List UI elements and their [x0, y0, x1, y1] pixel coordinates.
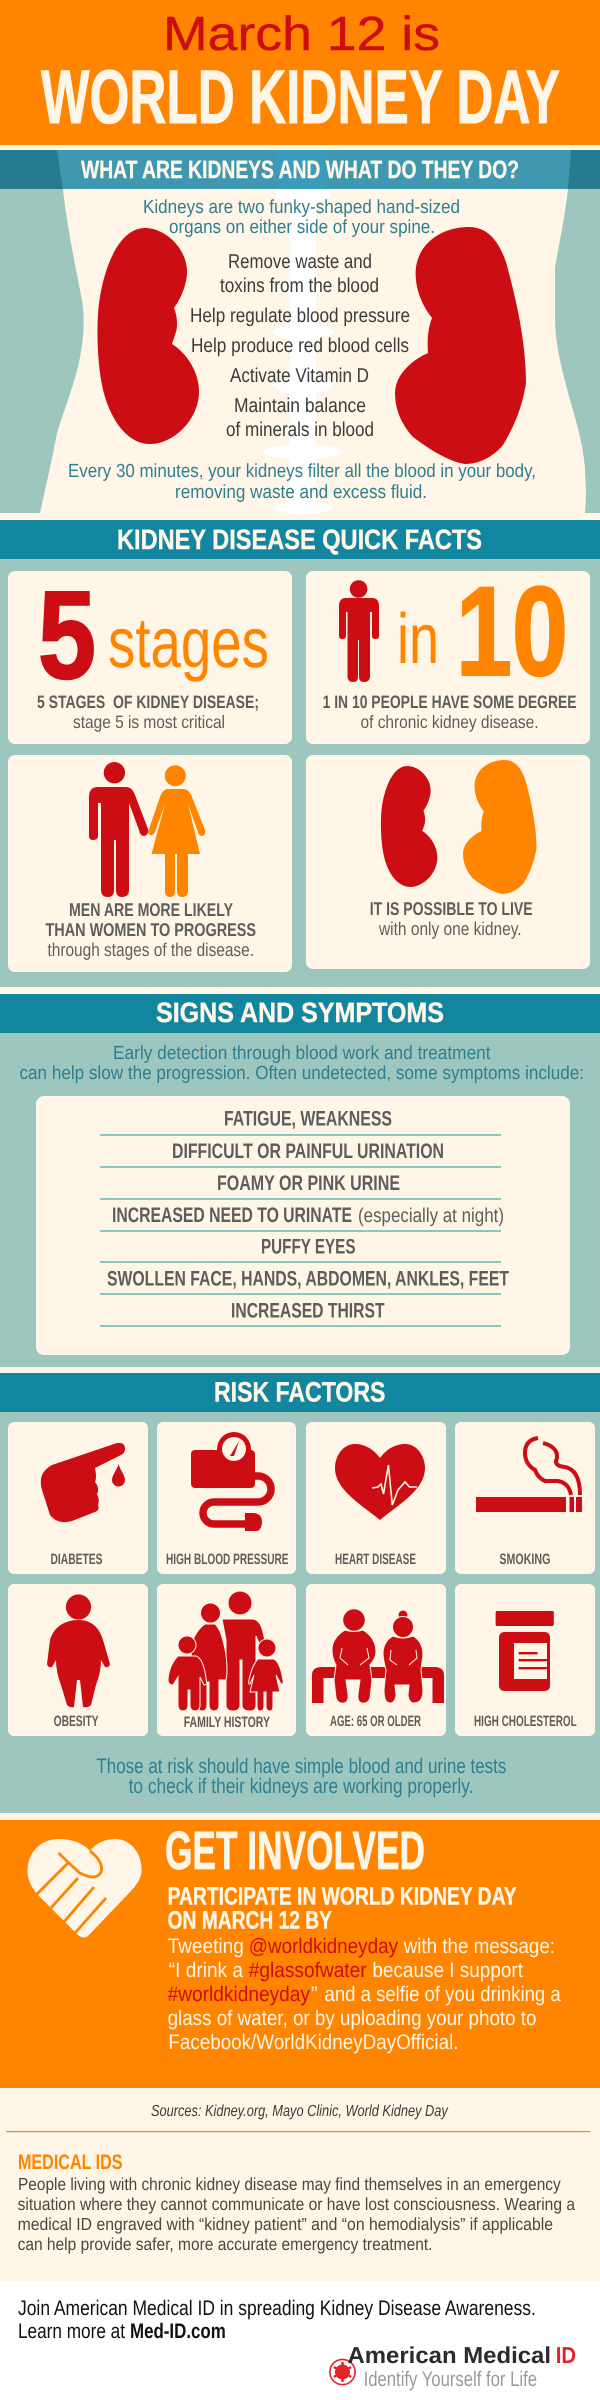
logo: American Medical ID: Identify Yourself for Life: [364, 2368, 537, 2391]
section heading: RISK FACTORS: [214, 1377, 385, 1408]
symptom list: INCREASED NEED TO URINATE: [112, 1204, 352, 1227]
call to join text: [18, 2297, 536, 2343]
symptoms card: [36, 1096, 570, 1355]
card: 1 in 10: [306, 560, 590, 744]
symptom list: DIFFICULT OR PAINFUL URINATION: [172, 1140, 444, 1163]
call to action text: and a selfie of you drinking a: [324, 1983, 561, 2006]
caption: of chronic kidney disease.: [360, 712, 538, 732]
caption: THAN WOMEN TO PROGRESS: [46, 919, 256, 940]
card: obesity: [8, 1584, 148, 1736]
card: heart disease: [306, 1422, 446, 1574]
closing text: to check if their kidneys are working properly.: [129, 1775, 473, 1798]
heading: MEDICAL IDS: [18, 2151, 122, 2174]
call to action text: @worldkidneyday: [249, 1935, 398, 1958]
symptom list: FOAMY OR PINK URINE: [217, 1172, 400, 1195]
label: HEART DISEASE: [335, 1551, 416, 1568]
panel: get involved: [0, 1820, 600, 2088]
title date line: March 12 is: [163, 8, 440, 61]
label: HIGH BLOOD PRESSURE: [166, 1551, 288, 1568]
intro text: [20, 1043, 584, 1084]
label: SMOKING: [499, 1551, 550, 1568]
intro text: Early detection through blood work and treatment: [113, 1043, 491, 1064]
icon: heart-shaped hands: [28, 1839, 142, 1938]
body text: medical ID engraved with “kidney patient” and “on hemodialysis” if applicable: [18, 2214, 553, 2234]
heading: GET INVOLVED: [165, 1821, 425, 1881]
subheading: [168, 1883, 517, 1935]
icon: right kidney: [395, 227, 526, 464]
kidney functions list: Remove waste and: [228, 251, 372, 273]
call to action text: [168, 1935, 561, 2054]
logo: American Medical ID: [330, 2342, 576, 2391]
kidney functions list: Activate Vitamin D: [230, 365, 369, 387]
filter fact text: [68, 461, 536, 503]
label: AGE: 65 OR OLDER: [330, 1713, 421, 1730]
caption: through stages of the disease.: [48, 939, 254, 960]
icon: orange kidney: [463, 760, 536, 894]
symptom list: INCREASED THIRST: [231, 1300, 385, 1323]
call to action text: #glassofwater: [249, 1959, 367, 1982]
call to join text: Med-ID.com: [130, 2320, 226, 2343]
card: diabetes: [8, 1422, 148, 1574]
call to action text: glass of water, or by uploading your photo to: [168, 2007, 536, 2030]
icon: left kidney: [97, 228, 199, 444]
section heading: SIGNS AND SYMPTOMS: [156, 997, 444, 1028]
kidney functions list: of minerals in blood: [226, 419, 374, 441]
icon: seated elderly couple: [312, 1609, 444, 1703]
symptom list: (especially at night): [358, 1205, 504, 1227]
label: FAMILY HISTORY: [184, 1714, 270, 1731]
intro text: Kidneys are two funky-shaped hand-sized: [143, 197, 460, 218]
card: 5 stages: [8, 566, 292, 744]
caption: with only one kidney.: [378, 918, 522, 939]
caption: MEN ARE MORE LIKELY: [69, 899, 234, 920]
call to action text: because I support: [372, 1959, 523, 1982]
header banner: [0, 0, 600, 145]
body text: can help provide safer, more accurate emergency treatment.: [18, 2234, 432, 2254]
word stages: stages: [108, 604, 269, 683]
closing text: [96, 1755, 506, 1798]
card: family history: [157, 1584, 296, 1736]
icon: woman: [148, 765, 205, 897]
panel: quick facts: [0, 520, 600, 987]
call to join text: Learn more at: [18, 2320, 125, 2343]
kidney functions list: Maintain balance: [234, 395, 366, 417]
icon: heart with pulse: [335, 1444, 425, 1520]
icon: person: [339, 580, 379, 682]
kidney functions list: toxins from the blood: [220, 275, 379, 297]
big number 5: 5: [38, 566, 96, 705]
subheading: ON MARCH 12 BY: [168, 1907, 332, 1935]
card: high cholesterol: [455, 1584, 595, 1736]
icon: family: [168, 1591, 283, 1711]
icon: pill bottle: [496, 1611, 554, 1691]
caption: stage 5 is most critical: [73, 712, 225, 732]
icon: cigarette: [476, 1438, 582, 1512]
intro text: organs on either side of your spine.: [169, 217, 435, 238]
caption: 5 STAGES OF KIDNEY DISEASE;: [37, 692, 259, 712]
panel: medical ids: [18, 2151, 575, 2254]
card: age: [306, 1584, 446, 1736]
icon: red kidney: [381, 766, 437, 887]
caption: [370, 898, 533, 939]
kidney functions list: Help produce red blood cells: [191, 335, 409, 357]
logo: American Medical ID: ID: [556, 2342, 576, 2368]
icon: man: [89, 762, 148, 897]
kidney functions list: [190, 251, 410, 441]
symptom list: [107, 1108, 509, 1323]
intro text: [143, 197, 460, 238]
label: OBESITY: [54, 1713, 99, 1730]
call to action text: “I drink a: [169, 1959, 243, 1982]
icon: blood pressure cuff: [191, 1432, 271, 1531]
call to action text: #worldkidneyday: [168, 1983, 310, 2006]
footer: [0, 2281, 600, 2400]
panel: signs and symptoms: [0, 994, 600, 1367]
call to action text: ”: [311, 1983, 318, 2006]
card: smoking: [455, 1422, 595, 1574]
caption: [46, 899, 256, 960]
section heading: KIDNEY DISEASE QUICK FACTS: [117, 524, 482, 555]
call to action text: with the message:: [403, 1935, 555, 1958]
logo: American Medical ID: American Medical: [348, 2342, 551, 2368]
big number 10: 10: [456, 560, 568, 702]
call to action text: Facebook/WorldKidneyDayOfficial.: [168, 2031, 458, 2054]
filter fact text: removing waste and excess fluid.: [175, 482, 427, 503]
card: men and women: [8, 755, 292, 972]
icon: finger with blood drop: [41, 1443, 125, 1522]
body text: [18, 2174, 575, 2254]
symptom list: PUFFY EYES: [261, 1236, 356, 1259]
call to action text: Tweeting: [168, 1935, 244, 1958]
icon: obese figure: [47, 1594, 110, 1707]
label: DIABETES: [50, 1551, 102, 1568]
kidney functions list: Help regulate blood pressure: [190, 305, 410, 327]
sources: Sources: Kidney.org, Mayo Clinic, World Kidney Day: [151, 2103, 449, 2120]
card: high blood pressure: [157, 1422, 296, 1574]
card: one kidney: [306, 755, 590, 969]
closing text: Those at risk should have simple blood and urine tests: [96, 1755, 506, 1778]
caption: IT IS POSSIBLE TO LIVE: [370, 898, 533, 919]
word in: in: [397, 600, 439, 679]
panel: risk factors: [0, 1373, 600, 1813]
filter fact text: Every 30 minutes, your kidneys filter all the blood in your body,: [68, 461, 536, 482]
symptom list: FATIGUE, WEAKNESS: [224, 1108, 392, 1131]
caption: [37, 692, 259, 732]
panel: what are kidneys: [0, 150, 600, 514]
caption: [323, 692, 577, 732]
